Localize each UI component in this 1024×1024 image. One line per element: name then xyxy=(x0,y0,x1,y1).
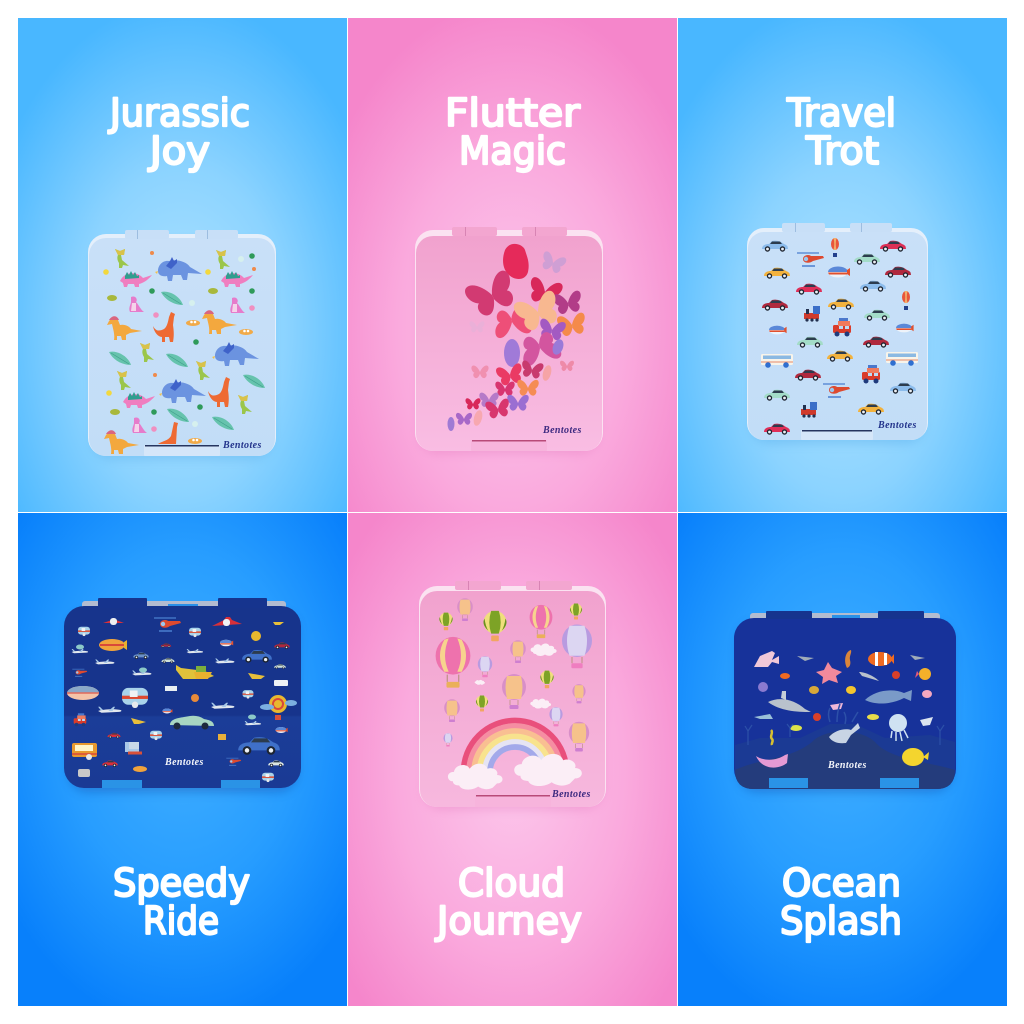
panel: Flutter Magic background xyxy=(348,18,677,512)
title: Flutter Magic xyxy=(445,91,580,173)
title: Ocean Splash: Splash xyxy=(780,899,902,943)
logo: Bentotes: Bentotes xyxy=(164,757,204,768)
title: Travel Trot xyxy=(786,91,896,173)
lunch box: Travel Trot xyxy=(747,223,928,444)
title: Jurassic Joy xyxy=(108,91,250,173)
rainbow xyxy=(464,720,566,824)
lunch box: Cloud Journey xyxy=(419,581,606,824)
lunch box: Ocean Splash xyxy=(734,611,956,792)
panel: Ocean Splash background xyxy=(678,513,1007,1006)
title: Jurassic Joy: Joy xyxy=(148,129,210,173)
logo: Bentotes: Bentotes xyxy=(551,789,591,800)
title: Ocean Splash xyxy=(780,861,902,943)
title: Cloud Journey xyxy=(435,861,582,943)
title: Cloud Journey: Cloud xyxy=(458,861,565,905)
title: Speedy Ride: Ride xyxy=(143,899,219,943)
title: Jurassic Joy: Jurassic xyxy=(108,91,250,135)
panel: Travel Trot background xyxy=(678,18,1007,512)
title: Cloud Journey: Journey xyxy=(435,899,582,943)
title: Travel Trot: Trot xyxy=(805,129,879,173)
logo: Bentotes: Bentotes xyxy=(877,420,917,431)
logo: Bentotes: Bentotes xyxy=(542,425,582,436)
title: Flutter Magic: Flutter xyxy=(445,91,580,135)
lunch box: Speedy Ride xyxy=(64,598,301,792)
logo: Bentotes: Bentotes xyxy=(222,440,262,451)
title: Speedy Ride xyxy=(113,861,250,943)
title: Ocean Splash: Ocean xyxy=(782,861,901,905)
title: Flutter Magic: Magic xyxy=(459,129,566,173)
panel: Cloud Journey background xyxy=(348,513,677,1006)
lunch box: Flutter Magic xyxy=(415,227,603,454)
panel: Speedy Ride background xyxy=(18,513,347,1006)
title: Travel Trot: Travel xyxy=(786,91,896,135)
logo: Bentotes: Bentotes xyxy=(827,760,867,771)
lunch box: Jurassic Joy xyxy=(88,230,276,460)
panel: Jurassic Joy background xyxy=(18,18,347,512)
title: Speedy Ride: Speedy xyxy=(113,861,250,905)
